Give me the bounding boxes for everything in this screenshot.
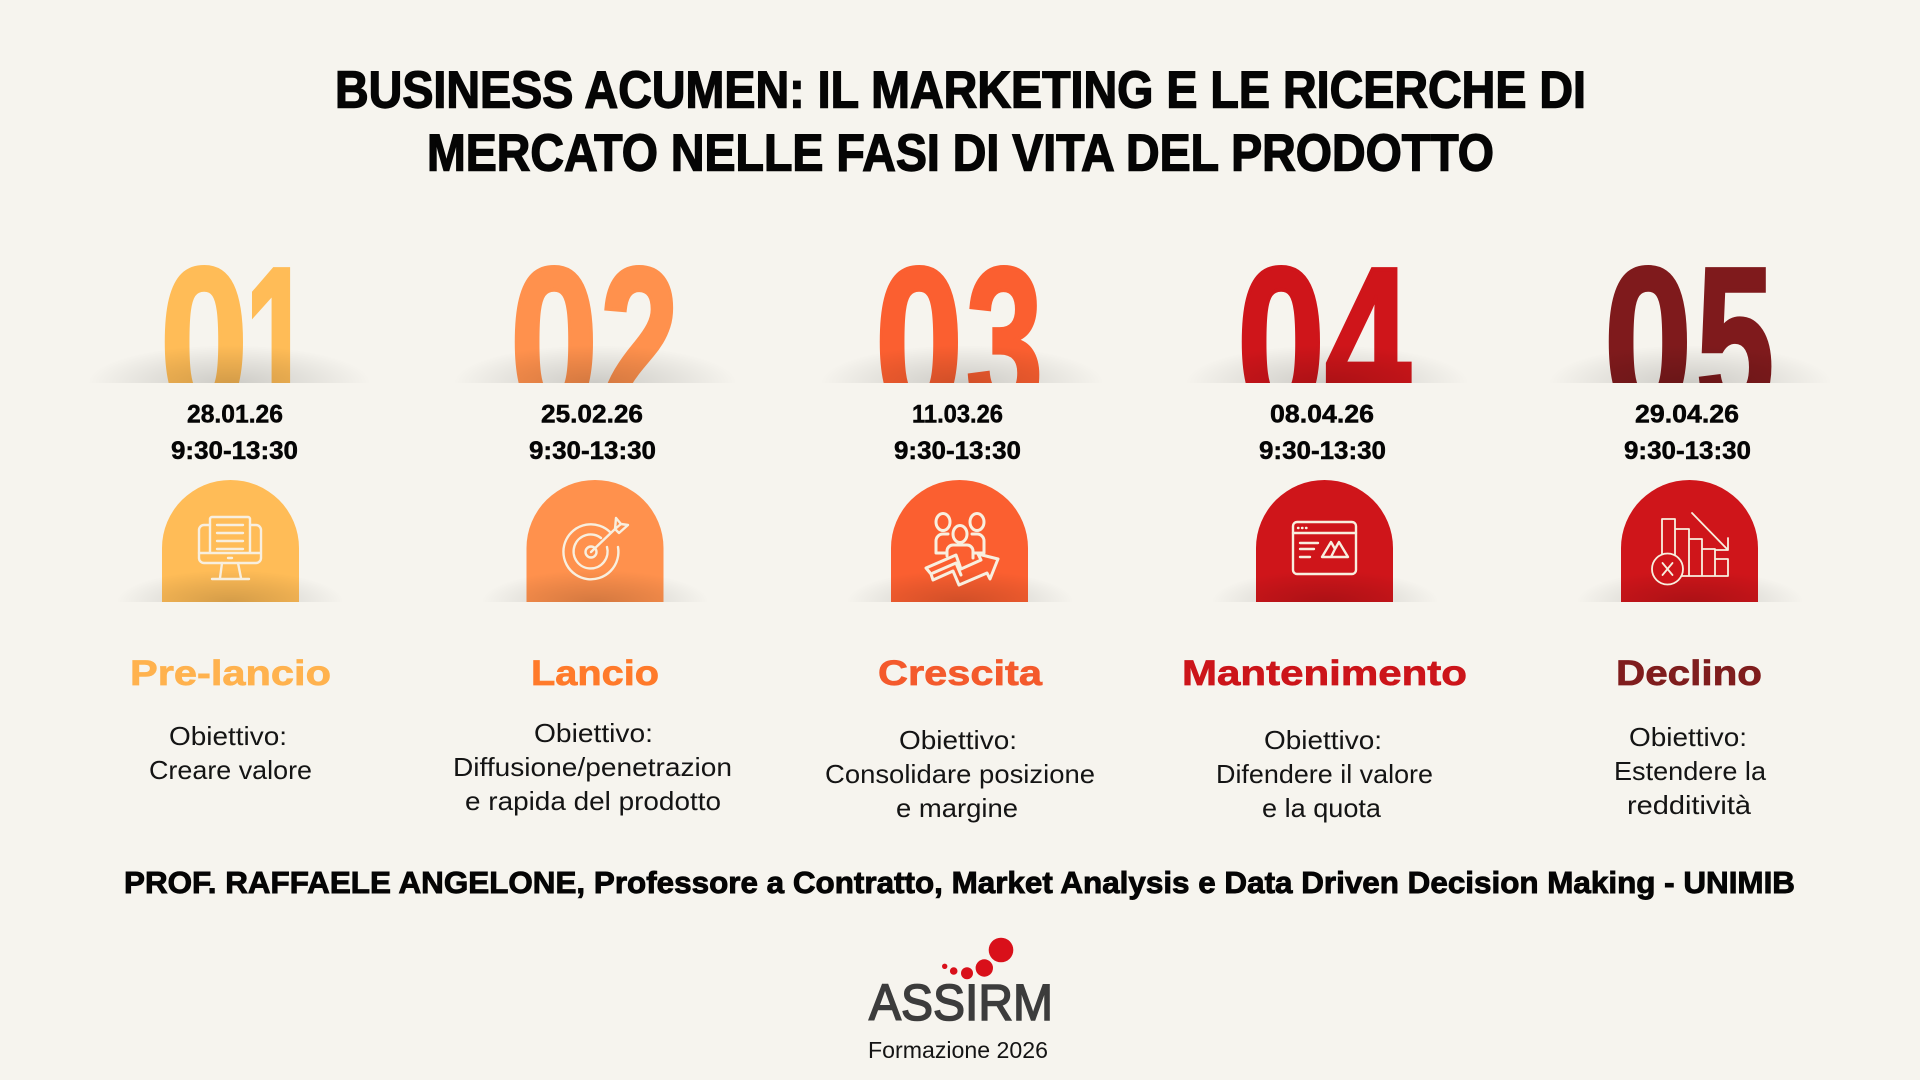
number 04	[1212, 265, 1442, 383]
date and time 04: 9:30-13:30	[1259, 437, 1386, 465]
phase name: Lancio	[531, 654, 659, 693]
panel: step 01 Pre-lancio	[114, 265, 344, 780]
objective text	[1216, 725, 1433, 823]
number 01	[114, 265, 344, 383]
icon badge: team with rising arrow	[868, 480, 1052, 602]
date and time 02	[529, 400, 656, 465]
phase name: Mantenimento	[1182, 654, 1467, 693]
phase name: Crescita	[878, 654, 1043, 693]
icon badge: target with arrow	[503, 480, 687, 602]
objective text: Obiettivo:	[534, 718, 653, 748]
objective text: Creare valore	[149, 755, 312, 785]
date and time 03: 9:30-13:30	[894, 437, 1021, 465]
number 02: 0	[510, 223, 598, 460]
number 01: 1	[245, 223, 311, 460]
objective text: Estendere la	[1614, 756, 1767, 786]
date and time 05: 9:30-13:30	[1624, 437, 1751, 465]
title: MERCATO NELLE FASI DI VITA DEL PRODOTTO	[427, 124, 1494, 182]
number 02: 2	[600, 223, 679, 460]
objective text: e rapida del prodotto	[465, 786, 721, 816]
panel: step 03 Crescita	[826, 265, 1094, 822]
date and time 03	[894, 400, 1021, 465]
number 03	[848, 265, 1076, 383]
title: BUSINESS ACUMEN: IL MARKETING E LE RICERCHE DI	[335, 62, 1586, 120]
objective text: Diffusione/penetrazion	[453, 752, 732, 782]
objective text: e la quota	[1262, 793, 1382, 823]
number 05	[1576, 265, 1804, 383]
objective text	[1614, 722, 1767, 820]
objective text: e margine	[896, 793, 1018, 823]
date and time 03: 11.03.26	[912, 400, 1003, 428]
panel: step 04 Mantenimento	[1182, 223, 1469, 823]
icon badge: browser window	[1233, 480, 1417, 602]
date and time 05	[1624, 400, 1751, 465]
objective text	[149, 721, 312, 785]
objective text: Obiettivo:	[1629, 722, 1747, 752]
date and time 02: 9:30-13:30	[529, 437, 656, 465]
phase name: Pre-lancio	[130, 654, 331, 693]
date and time 05: 29.04.26	[1635, 400, 1739, 428]
objective text: Difendere il valore	[1216, 759, 1433, 789]
number 03: 0	[875, 223, 963, 460]
date and time 02: 25.02.26	[541, 400, 643, 428]
icon badge: declining bars	[1598, 480, 1782, 602]
number 05: 0	[1604, 223, 1692, 460]
date and time 01: 28.01.26	[187, 400, 283, 428]
logo: ASSIRM: ASSIRM	[869, 974, 1053, 1031]
objective text: Obiettivo:	[899, 725, 1017, 755]
date and time 01: 9:30-13:30	[171, 437, 298, 465]
logo: ASSIRM	[869, 938, 1053, 1031]
number 02	[480, 265, 710, 383]
speaker line: PROF. RAFFAELE ANGELONE, Professore a Contratto, Market Analysis e Data Driven Decision Making - UNIMIB	[124, 865, 1795, 900]
number 05: 5	[1696, 223, 1774, 460]
objective text	[453, 718, 732, 816]
number 01: 0	[160, 223, 248, 460]
objective text: Obiettivo:	[1264, 725, 1382, 755]
number 04: 4	[1325, 223, 1411, 460]
objective text: Consolidare posizione	[825, 759, 1095, 789]
title	[335, 62, 1586, 182]
objective text: Obiettivo:	[169, 721, 287, 751]
number 04: 0	[1237, 223, 1325, 460]
number 03: 3	[966, 223, 1043, 460]
objective text	[825, 725, 1095, 823]
date and time 04	[1259, 400, 1386, 465]
panel: step 05 Declino	[1576, 265, 1804, 814]
icon badge: monitor with document	[138, 480, 322, 602]
logo caption: Formazione 2026	[868, 1037, 1048, 1063]
phase name: Declino	[1616, 654, 1762, 693]
date and time 04: 08.04.26	[1270, 400, 1374, 428]
panel: step 02 Lancio	[453, 223, 737, 816]
date and time 01	[171, 400, 298, 465]
objective text: redditività	[1627, 790, 1752, 820]
